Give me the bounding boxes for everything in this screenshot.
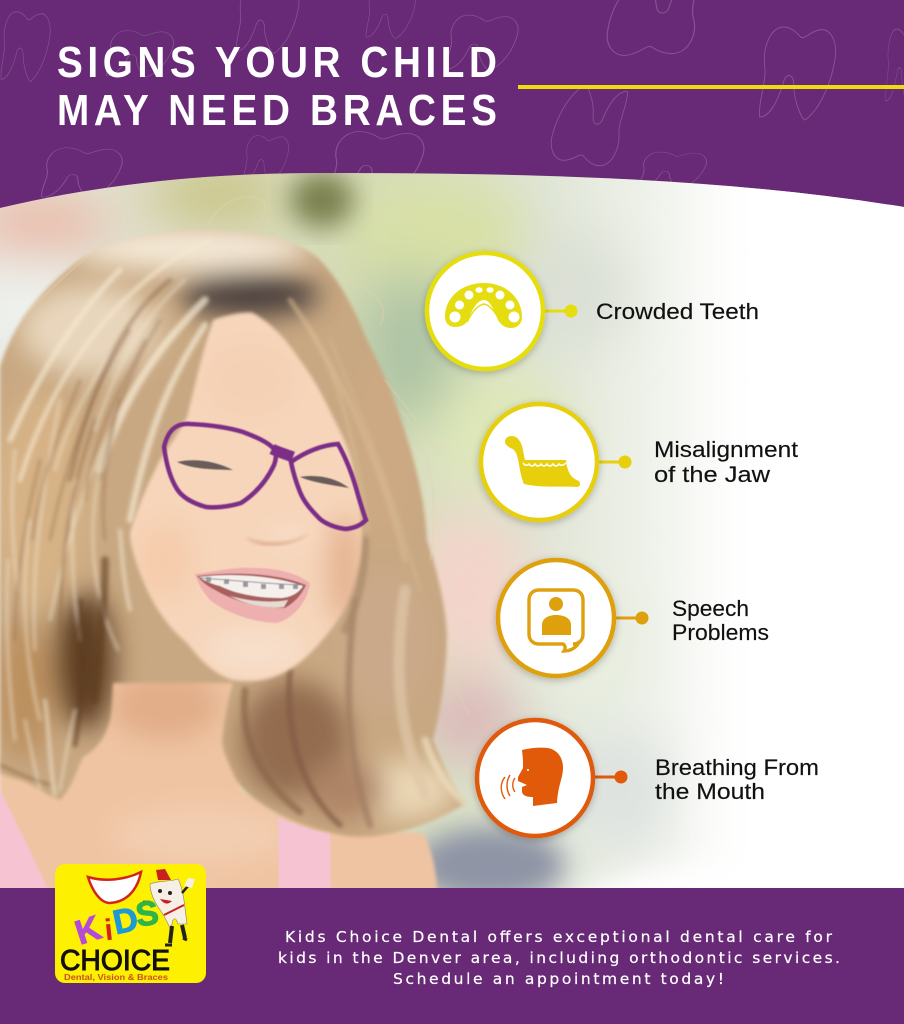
smile with braces — [195, 568, 310, 623]
loose flyaway hairs — [20, 196, 433, 560]
yellow title rule — [518, 85, 904, 89]
footer text: Kids Choice Dental offers exceptional dental care for — [285, 928, 833, 946]
hair colour tones — [0, 226, 455, 820]
blurred photo backdrop — [0, 170, 670, 850]
title: MAY NEED BRACES — [57, 85, 497, 135]
label: crowded teeth: Crowded Teeth — [596, 299, 759, 324]
tooth outline pattern — [1, 0, 904, 199]
eyes — [177, 460, 349, 488]
photo: girl with braces — [0, 170, 904, 950]
logo wordmark KiDS: S — [133, 894, 161, 935]
grey lower backdrop — [415, 827, 565, 903]
white fade to the right — [692, 183, 780, 191]
label: misalignment of the jaw — [654, 437, 798, 487]
logo tooth mascot — [143, 869, 195, 945]
footer text — [278, 928, 840, 988]
icon: head breathing — [501, 748, 563, 806]
item: speech problems — [498, 560, 769, 676]
nose shadow — [248, 534, 307, 546]
hair mass — [0, 220, 480, 840]
skin: shoulders and neck — [0, 681, 439, 888]
label: misalignment of the jaw: of the Jaw — [654, 462, 770, 487]
item: crowded teeth — [427, 253, 759, 369]
footer text: kids in the Denver area, including orthodontic services. — [278, 949, 840, 967]
logo wordmark KiDS: D — [110, 900, 142, 942]
face tones — [139, 512, 362, 672]
logo: Kids Choice — [55, 864, 206, 983]
pink top — [0, 790, 331, 890]
footer band — [0, 888, 904, 1024]
label: breathing from the mouth: Breathing From — [655, 755, 819, 780]
hair strands — [0, 240, 465, 825]
logo wordmark CHOICE: CHOICE — [60, 945, 170, 977]
logo tagline: Dental, Vision & Braces — [64, 972, 168, 982]
title — [57, 37, 497, 135]
label: misalignment of the jaw: Misalignment — [654, 437, 798, 462]
title: SIGNS YOUR CHILD — [57, 37, 497, 87]
item: misalignment of the jaw — [481, 404, 798, 520]
logo wordmark KiDS — [71, 894, 161, 952]
header background — [0, 0, 904, 300]
icon: person in speech bubble — [529, 590, 583, 651]
logo wordmark KiDS: K — [71, 909, 106, 952]
logo wordmark KiDS: i — [103, 914, 115, 947]
label: speech problems: Speech — [672, 596, 749, 621]
label: speech problems: Problems — [672, 620, 769, 645]
label: breathing from the mouth: the Mouth — [655, 779, 765, 804]
label: speech problems — [672, 596, 769, 645]
footer text: Schedule an appointment today! — [393, 970, 724, 988]
logo smile — [88, 872, 141, 903]
label: breathing from the mouth — [655, 755, 819, 804]
icon: dental arch — [445, 283, 522, 328]
glasses — [164, 424, 366, 529]
item: breathing from the mouth — [477, 720, 819, 836]
face — [120, 305, 370, 690]
dark olive patch — [290, 172, 354, 228]
icon: jaw — [505, 436, 580, 487]
